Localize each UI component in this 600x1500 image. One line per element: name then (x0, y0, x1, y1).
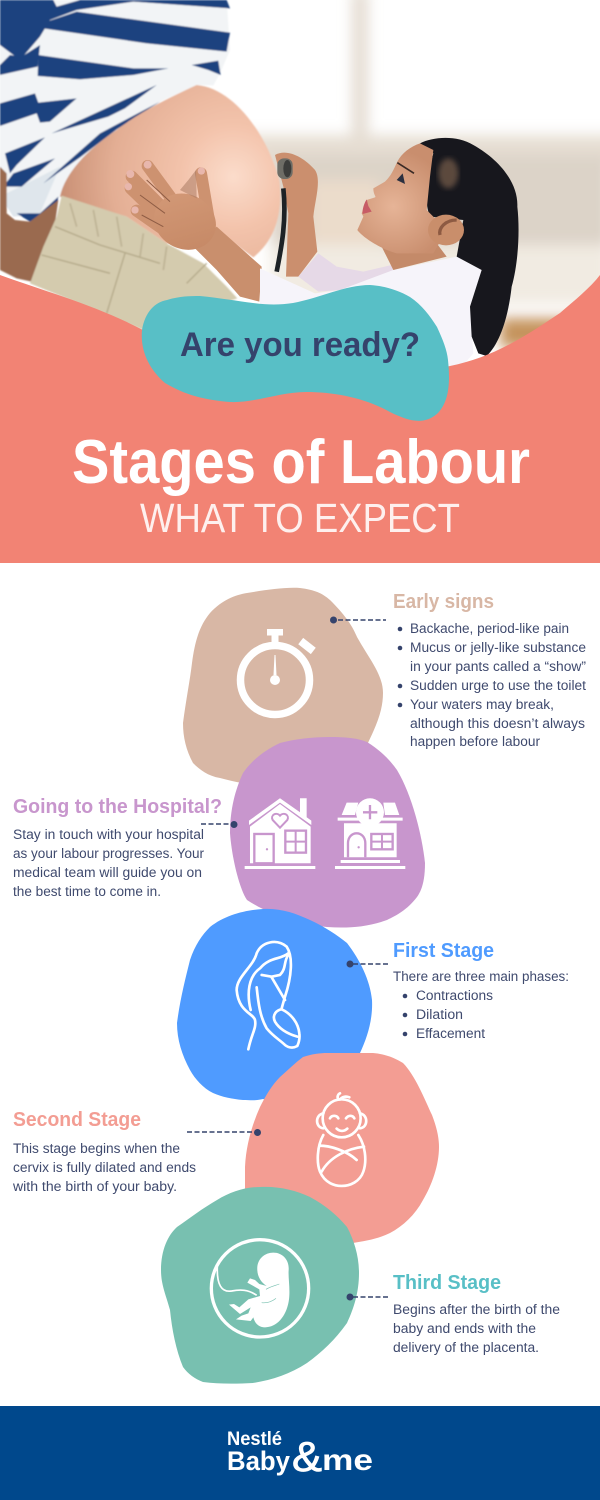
blob: are you ready (142, 285, 449, 421)
panel: third stage: Begins after the birth of the (393, 1302, 560, 1317)
panel: early signs: although this doesn’t always (410, 716, 585, 731)
panel: early signs: Early signs (393, 591, 494, 613)
panel: early signs: Backache, period-like pain (410, 621, 569, 636)
panel: early signs: Mucus or jelly-like substance (410, 640, 586, 655)
panel: second stage (12, 1109, 196, 1194)
panel: first stage: There are three main phases: (393, 969, 569, 984)
blob: first stage (177, 909, 372, 1110)
logo: Nestlé Baby & me: & (292, 1433, 322, 1480)
panel: early signs: in your pants called a “show” (410, 659, 586, 674)
panel: first stage: Contractions (416, 988, 493, 1003)
panel: third stage (393, 1272, 560, 1355)
footer bar (0, 1406, 600, 1500)
callout line: first stage (346, 960, 389, 968)
khaki shorts (30, 196, 237, 330)
panel: first stage: First Stage (393, 940, 494, 962)
face (357, 143, 447, 253)
icon: swaddled baby (317, 1093, 366, 1186)
icon: house (245, 798, 315, 869)
coral header background (0, 275, 600, 563)
logo: Nestlé Baby & me: Baby (227, 1446, 290, 1476)
panel: early signs: Your waters may break, (410, 697, 554, 712)
panel: going to the hospital: Going to the Hospital? (13, 796, 222, 818)
hand holding shirt (0, 167, 58, 282)
icon: stopwatch (240, 629, 316, 714)
title: Stages of Labour (72, 428, 530, 497)
icon: fetus in womb (211, 1240, 309, 1337)
blob: third stage (161, 1187, 359, 1384)
panel: third stage: Third Stage (393, 1272, 501, 1294)
panel: going to the hospital (13, 796, 222, 899)
panel: first stage: Dilation (416, 1007, 463, 1022)
panel: third stage: delivery of the placenta. (393, 1340, 539, 1355)
panel: first stage (393, 940, 569, 1041)
panel: second stage: Second Stage (13, 1109, 141, 1131)
panel: going to the hospital: as your labour progresses. Your (13, 846, 204, 861)
logo: Nestlé Baby & me: me (322, 1444, 373, 1477)
blob: early signs (183, 588, 383, 790)
callout line: second stage (187, 1129, 261, 1136)
panel: second stage: cervix is fully dilated and ends (13, 1160, 196, 1175)
hair and ponytail (420, 138, 519, 356)
belly (60, 85, 280, 257)
blurred room background (240, 0, 600, 348)
icon: pregnant woman line art (237, 942, 300, 1049)
blob: second stage (245, 1053, 439, 1243)
panel: second stage: with the birth of your baby. (12, 1179, 177, 1194)
panel: early signs (393, 591, 586, 749)
logo: Nestlé Baby & me (227, 1429, 373, 1480)
callout line: third stage (346, 1294, 389, 1300)
panel: early signs: Sudden urge to use the toilet (410, 678, 586, 693)
subtitle: WHAT TO EXPECT (140, 495, 460, 541)
child's far arm, stethoscope, coat (260, 138, 519, 367)
icon: hospital (335, 798, 405, 869)
photo: child listening to pregnant belly (0, 0, 600, 367)
shirt (0, 0, 230, 217)
panel: early signs: happen before labour (410, 734, 541, 749)
panel: third stage: baby and ends with the (393, 1321, 536, 1336)
logo: Nestlé Baby & me: Nestlé (227, 1429, 282, 1450)
pregnant figure (0, 0, 280, 330)
callout line: early signs (330, 616, 386, 624)
callout line: hospital (201, 821, 238, 828)
child's near hand and arm (125, 161, 262, 302)
panel: going to the hospital: Stay in touch with your hospital (13, 827, 204, 842)
panel: first stage: Effacement (416, 1026, 485, 1041)
panel: going to the hospital: the best time to come in. (13, 884, 161, 899)
panel: second stage: This stage begins when the (13, 1141, 180, 1156)
blob: going to the hospital (230, 737, 425, 927)
heading: are you ready: Are you ready? (180, 326, 420, 364)
panel: going to the hospital: medical team will guide you on (13, 865, 202, 880)
